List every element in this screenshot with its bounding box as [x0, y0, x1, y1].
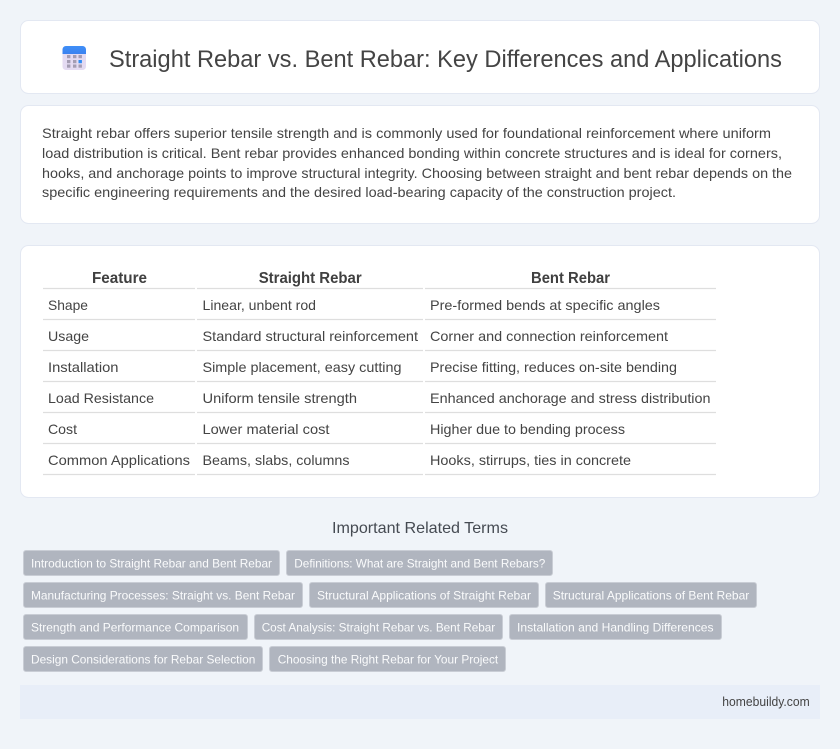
- row: installation: Simple placement, easy cutting: [202, 359, 402, 375]
- footer bar: [20, 685, 820, 719]
- table header: Straight Rebar: [259, 270, 362, 287]
- tag: [546, 582, 756, 608]
- tag: [286, 550, 552, 576]
- table header: Feature: [92, 270, 147, 287]
- row: cost: Lower material cost: [202, 421, 330, 437]
- tag group: related terms: [24, 550, 756, 672]
- text block: introduction paragraph: specific engineering requirements and the desired load-bearing capacity of the construction project.: [42, 184, 676, 200]
- row: cost: [48, 421, 625, 437]
- table header: Bent Rebar: [531, 270, 610, 287]
- row: common applications: Hooks, stirrups, ties in concrete: [430, 452, 631, 468]
- tag: Definitions: What are Straight and Bent Rebars?: [294, 556, 546, 570]
- row: shape: Pre-formed bends at specific angles: [430, 297, 660, 313]
- title: Straight Rebar vs. Bent Rebar: Key Differences and Applications: [109, 46, 782, 73]
- tag: Installation and Handling Differences: [517, 620, 714, 634]
- tag: Manufacturing Processes: Straight vs. Bent Rebar: [31, 588, 295, 602]
- row: cost: Higher due to bending process: [430, 421, 625, 437]
- tag: Choosing the Right Rebar for Your Project: [278, 652, 499, 666]
- text block: introduction paragraph: Straight rebar offers superior tensile strength and is commonly used for foundational reinforcement where uniform: [42, 125, 771, 141]
- tag: Strength and Performance Comparison: [31, 620, 239, 634]
- row: installation: Precise fitting, reduces on-site bending: [430, 359, 677, 375]
- tag: [24, 582, 302, 608]
- footer site name: homebuildy.com: [722, 695, 810, 709]
- tag: Structural Applications of Straight Rebar: [317, 588, 531, 602]
- tag: Cost Analysis: Straight Rebar vs. Bent Rebar: [262, 620, 495, 634]
- tag: [270, 646, 506, 672]
- row: shape: Linear, unbent rod: [202, 297, 316, 313]
- tag: Design Considerations for Rebar Selection: [31, 652, 255, 666]
- panel: comparison table: [20, 246, 820, 498]
- tag: Structural Applications of Bent Rebar: [553, 588, 749, 602]
- row: shape: Shape: [48, 297, 88, 313]
- row: common applications: [48, 452, 631, 468]
- row: common applications: Beams, slabs, columns: [202, 452, 350, 468]
- panel: introduction: [20, 106, 820, 224]
- tag: [310, 582, 538, 608]
- panel: title header: [20, 20, 820, 94]
- tag: [254, 614, 502, 640]
- row: load resistance: Load Resistance: [48, 390, 154, 406]
- row: load resistance: Enhanced anchorage and stress distribution: [430, 390, 710, 406]
- row: usage: [48, 328, 668, 344]
- tag: [24, 550, 280, 576]
- row: usage: Corner and connection reinforcement: [430, 328, 668, 344]
- text block: introduction paragraph: hooks, and anchorage points to improve structural integrity. Choosing between straight and bent rebar depends on the: [42, 165, 792, 181]
- row: installation: Installation: [48, 359, 118, 375]
- row: load resistance: Uniform tensile strength: [202, 390, 357, 406]
- text block: introduction paragraph: load distribution is critical. Bent rebar provides enhanced bonding within concrete structures and is ideal for corners,: [42, 145, 782, 161]
- row: usage: Usage: [48, 328, 89, 344]
- row: shape: [48, 297, 660, 313]
- row: installation: [48, 359, 677, 375]
- row: common applications: Common Applications: [48, 452, 190, 468]
- icon: calendar: [62, 46, 86, 70]
- tag: [510, 614, 722, 640]
- row: cost: Cost: [48, 421, 77, 437]
- row: load resistance: [48, 390, 710, 406]
- heading: important related terms: Important Related Terms: [332, 520, 508, 537]
- text block: introduction paragraph: [42, 125, 792, 200]
- row: usage: Standard structural reinforcement: [202, 328, 418, 344]
- table header: [92, 270, 610, 287]
- tag: [24, 646, 262, 672]
- tag: Introduction to Straight Rebar and Bent Rebar: [31, 556, 272, 570]
- tag: [24, 614, 248, 640]
